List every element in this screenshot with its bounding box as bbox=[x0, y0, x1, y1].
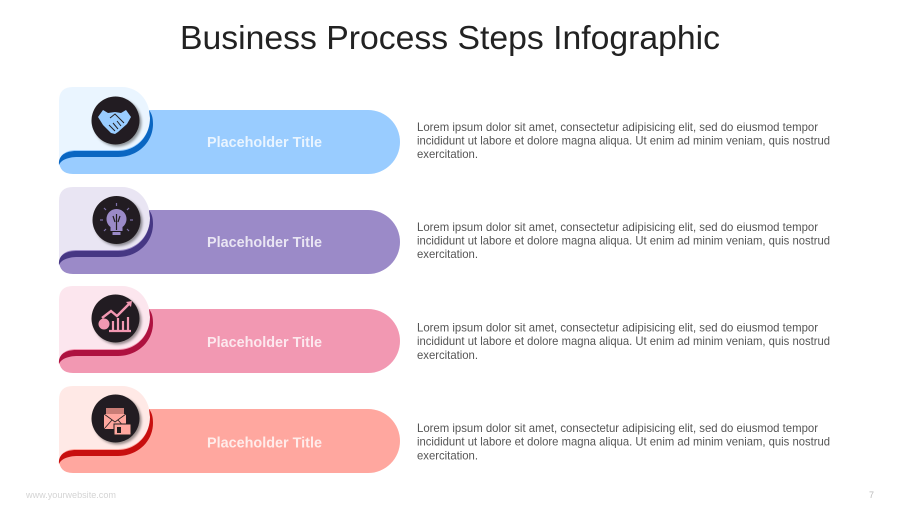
title: Business Process Steps Infographic bbox=[180, 19, 720, 56]
ribbon: step 1 bbox=[59, 110, 153, 165]
label: step 4: Placeholder Title bbox=[207, 436, 322, 452]
icon: chart growth bbox=[92, 294, 140, 342]
text: step 4: incididunt ut labore et dolore magna aliqua. Ut enim ad minim veniam, quis nostrud bbox=[417, 434, 830, 448]
ribbon: step 4 bbox=[59, 409, 153, 464]
icon: envelope with card bbox=[92, 394, 140, 442]
icon: light bulb bbox=[92, 196, 140, 244]
text: step 4: exercitation. bbox=[417, 448, 478, 462]
text: step 4: Lorem ipsum dolor sit amet, consectetur adipisicing elit, sed do eiusmod tempor bbox=[417, 421, 818, 435]
label: step 1: Placeholder Title bbox=[207, 135, 322, 151]
text: step 1: exercitation. bbox=[417, 147, 478, 161]
tab: step 3 bbox=[59, 286, 150, 362]
text: step 3: Lorem ipsum dolor sit amet, consectetur adipisicing elit, sed do eiusmod tempor bbox=[417, 320, 818, 334]
footer: website: www.yourwebsite.com bbox=[25, 490, 116, 500]
label: step 3: Placeholder Title bbox=[207, 335, 322, 351]
text: step 1: incididunt ut labore et dolore magna aliqua. Ut enim ad minim veniam, quis nostrud bbox=[417, 134, 830, 148]
label: step 2: Placeholder Title bbox=[207, 235, 322, 251]
bar: step 2 bbox=[59, 210, 400, 274]
text: step 3 bbox=[417, 320, 830, 362]
text: step 3: incididunt ut labore et dolore magna aliqua. Ut enim ad minim veniam, quis nostrud bbox=[417, 334, 830, 348]
text: step 1: Lorem ipsum dolor sit amet, consectetur adipisicing elit, sed do eiusmod tempor bbox=[417, 120, 818, 134]
bar: step 1 bbox=[59, 110, 400, 174]
panel: step 4 bbox=[59, 386, 830, 473]
icon: handshake bbox=[92, 96, 140, 144]
text: step 1 bbox=[417, 120, 830, 161]
panel: step 1 bbox=[59, 87, 830, 174]
tab: step 4 bbox=[59, 386, 150, 462]
text: step 2: incididunt ut labore et dolore magna aliqua. Ut enim ad minim veniam, quis nostrud bbox=[417, 234, 830, 248]
bar: step 4 bbox=[59, 409, 400, 473]
text: step 3: exercitation. bbox=[417, 348, 478, 362]
panel: step 2 bbox=[59, 187, 830, 274]
panel: step 3 bbox=[59, 286, 830, 373]
text: step 2: exercitation. bbox=[417, 247, 478, 261]
text: step 4 bbox=[417, 421, 830, 462]
text: step 2 bbox=[417, 220, 830, 261]
ribbon: step 2 bbox=[59, 210, 153, 265]
tab: step 2 bbox=[59, 187, 150, 263]
tab: step 1 bbox=[59, 87, 150, 163]
text: step 2: Lorem ipsum dolor sit amet, consectetur adipisicing elit, sed do eiusmod tempor bbox=[417, 220, 818, 234]
bar: step 3 bbox=[59, 309, 400, 373]
ribbon: step 3 bbox=[59, 309, 153, 364]
footer: page number: 7 bbox=[869, 490, 874, 500]
